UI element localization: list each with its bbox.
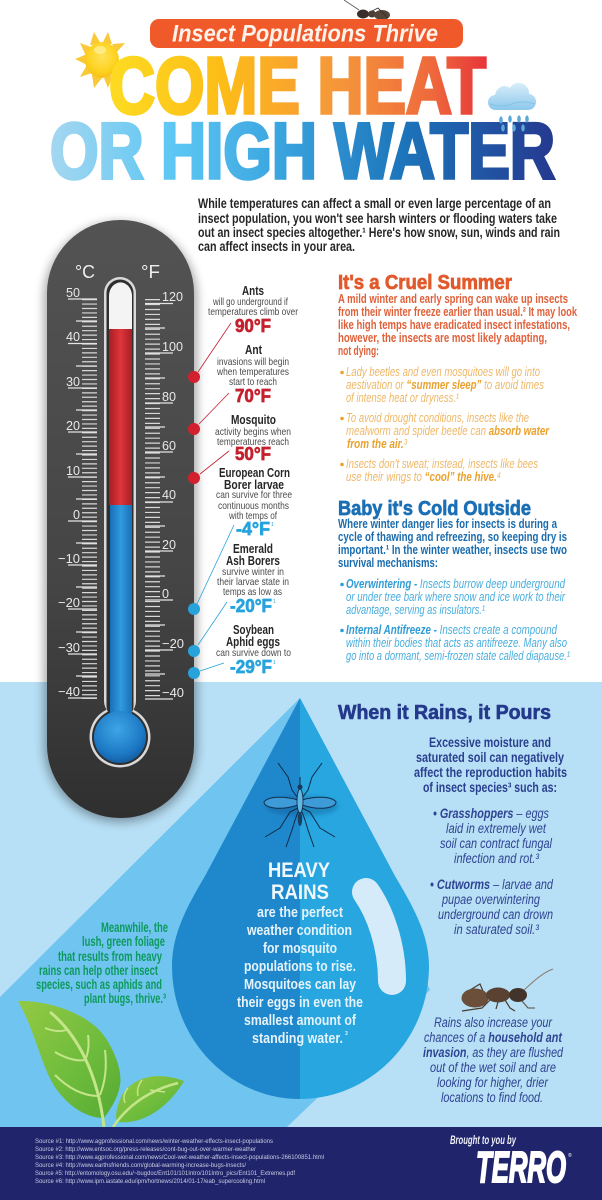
- text block: household ant invasion: chances of a household ant: [424, 1030, 562, 1045]
- title banner: Insect Populations Thrive: [172, 20, 438, 48]
- drop text: heavy rains: populations to rise.: [244, 959, 356, 975]
- text block: household ant invasion: out of the wet soil and are: [430, 1060, 556, 1075]
- celsius scale: 40: [66, 329, 80, 344]
- drop text: heavy rains: standing water.: [252, 1031, 343, 1047]
- fahrenheit scale: 120: [162, 289, 183, 304]
- callout: soybean aphid eggs -29F: [216, 623, 291, 677]
- fahrenheit scale: 0: [162, 586, 169, 601]
- celsius scale: −30: [58, 640, 80, 655]
- text block: green foliage: that results from heavy: [58, 949, 162, 964]
- celsius scale: 50: [66, 285, 80, 300]
- heading: cold outside: Baby it's Cold Outside: [338, 498, 531, 520]
- icon: mosquito: [264, 763, 338, 847]
- celsius scale: 10: [66, 463, 80, 478]
- drop text: heavy rains: Mosquitoes can lay: [244, 977, 356, 993]
- cold bullets: [340, 576, 570, 663]
- text block: cutworms: pupae overwintering: [441, 892, 540, 907]
- text block: household ant invasion: looking for higher, drier: [437, 1075, 548, 1090]
- panel: baby it's cold outside: [338, 498, 570, 663]
- callout: mosquito 50F: activity begins when: [215, 426, 291, 438]
- celsius scale: 20: [66, 418, 80, 433]
- callout: european corn borer -4F: can survive for three: [216, 489, 292, 501]
- intro text: can affect insects in your area.: [198, 238, 355, 254]
- cold body text: survival mechanisms:: [338, 555, 438, 570]
- callout: soybean aphid eggs -29F: can survive down to: [216, 647, 291, 659]
- text block: grasshoppers: • Grasshoppers – eggs: [433, 806, 549, 821]
- summer bullets: of intense heat or dryness.¹: [346, 390, 459, 405]
- callout: european corn borer -4F: -4°F: [236, 519, 270, 539]
- text block: cutworms: [430, 877, 553, 937]
- callout: european corn borer -4F: Borer larvae: [224, 478, 284, 492]
- text block: green foliage: rains can help other insect: [39, 963, 158, 978]
- celsius scale: 0: [73, 507, 80, 522]
- celsius scale: −20: [58, 595, 80, 610]
- drop text: heavy rains: their eggs in even the: [237, 995, 363, 1011]
- callout: european corn borer -4F: [216, 466, 292, 539]
- callout: soybean aphid eggs -29F: -29°F: [230, 657, 272, 677]
- callout: ant invasions 70F: when temperatures: [216, 366, 289, 378]
- text block: excessive moisture: affect the reproduction habits: [414, 765, 567, 780]
- heading: cruel summer: It's a Cruel Summer: [338, 272, 512, 294]
- celsius scale: −10: [58, 551, 80, 566]
- cold bullets: Internal Antifreeze - Insects create a compound: [346, 622, 558, 637]
- text block: household ant invasion: [423, 1015, 563, 1105]
- icon: ant on banner: [344, 0, 390, 20]
- text block: cutworms: in saturated soil.³: [454, 922, 539, 937]
- callout: emerald ash borers -20F: Ash Borers: [226, 554, 280, 568]
- fahrenheit scale: 20: [162, 537, 176, 552]
- text block: cutworms: underground can drown: [438, 907, 553, 922]
- drop text: heavy rains: smallest amount of: [244, 1013, 356, 1029]
- fahrenheit scale: 60: [162, 438, 176, 453]
- summer bullets: To avoid drought conditions, insects like the: [346, 410, 529, 425]
- drop text: heavy rains: for mosquito: [263, 941, 337, 957]
- cold body text: [338, 516, 567, 570]
- callout: emerald ash borers -20F: survive winter in: [222, 566, 284, 578]
- summer bullets: mealworm and spider beetle can absorb water: [346, 423, 550, 438]
- panel: footer: [0, 1127, 602, 1200]
- callout: emerald ash borers -20F: 1: [273, 599, 276, 605]
- logo: terro: ®: [568, 1152, 572, 1159]
- callout: emerald ash borers -20F: [217, 542, 289, 616]
- text block: green foliage: Meanwhile, the: [101, 920, 168, 935]
- text block: grasshoppers: infection and rot.³: [454, 851, 539, 866]
- drop text: heavy rains: [237, 859, 363, 1047]
- callout: ants 90F: will go underground if: [212, 296, 288, 308]
- thermometer: [44, 220, 197, 822]
- text block: household ant invasion: Rains also increase your: [434, 1015, 552, 1030]
- icon: brown ant: [462, 969, 553, 1011]
- panel: rain background band: [0, 682, 602, 1128]
- drop text: heavy rains: weather condition: [246, 923, 352, 939]
- callout: european corn borer -4F: with temps of: [228, 510, 277, 522]
- callout: mosquito 50F: temperatures reach: [217, 436, 289, 448]
- callout: soybean aphid eggs -29F: Aphid eggs: [226, 635, 280, 649]
- fahrenheit scale: °F: [141, 262, 160, 282]
- summer bullets: Insects don't sweat; instead, insects like bees: [346, 456, 538, 471]
- icon: water drop: [172, 698, 429, 1099]
- summer bullets: [340, 364, 550, 484]
- source list: Source #2: http://www.entsoc.org/press-releases/cont-bug-out-over-warmer-weather: [35, 1146, 257, 1153]
- text block: household ant invasion: locations to find food.: [441, 1090, 543, 1105]
- source list: Source #3: http://www.agprofessional.com/news/Cool-wet-weather-affects-insect-populations-266100851.html: [35, 1154, 325, 1161]
- callout: ants 90F: 90°F: [235, 316, 271, 336]
- callout: ant invasions 70F: 70°F: [235, 386, 271, 406]
- text block: green foliage: lush, green foliage: [82, 934, 165, 949]
- callout: mosquito 50F: [215, 413, 291, 464]
- text block: excessive moisture: of insect species³ such as:: [423, 780, 557, 795]
- celsius scale: °C: [75, 262, 95, 282]
- callout: emerald ash borers -20F: temps as low as: [223, 586, 282, 598]
- cold bullets: advantage, serving as insulators.¹: [346, 602, 485, 617]
- fahrenheit scale: 100: [162, 339, 183, 354]
- callout: emerald ash borers -20F: -20°F: [230, 596, 272, 616]
- text block: grasshoppers: laid in extremely wet: [446, 821, 547, 836]
- celsius scale: [58, 262, 97, 699]
- callout: mosquito 50F: 50°F: [235, 444, 271, 464]
- thermometer tube: [90, 277, 150, 768]
- drop text: heavy rains: 3: [345, 1031, 348, 1037]
- title: come heat: COME HEAT: [109, 41, 486, 130]
- text block: green foliage: [36, 920, 168, 1006]
- intro text: [198, 195, 560, 254]
- callout: ant invasions 70F: [216, 343, 289, 406]
- source list: Source #5: http://entomology.osu.edu/~bugdoc/Ent101/101Intro/101Intro_pics/Ent101_Extremes.pdf: [35, 1170, 295, 1177]
- summer body text: [338, 291, 578, 358]
- icon: rain cloud: [488, 83, 536, 132]
- callout: ants 90F: [208, 284, 298, 336]
- callout: ants 90F: temperatures climb over: [208, 306, 298, 318]
- callout: mosquito 50F: Mosquito: [231, 413, 276, 427]
- drop text: heavy rains: are the perfect: [257, 905, 343, 921]
- celsius scale: 30: [66, 374, 80, 389]
- callout: emerald ash borers -20F: their larvae state in: [217, 576, 289, 588]
- text block: grasshoppers: soil can contract fungal: [440, 836, 553, 851]
- callout: european corn borer -4F: European Corn: [219, 466, 290, 480]
- source list: Source #1: http://www.agprofessional.com/news/winter-weather-effects-insect-populations: [35, 1138, 274, 1145]
- fahrenheit scale: 80: [162, 389, 176, 404]
- fahrenheit scale: −40: [162, 685, 184, 700]
- text block: excessive moisture: [414, 735, 567, 795]
- brought to you by: Brought to you by: [450, 1133, 517, 1147]
- summer bullets: from the air.³: [347, 436, 407, 451]
- callout: ant invasions 70F: Ant: [245, 343, 263, 357]
- source list: Source #6: http://www.ipm.iastate.edu/ipm/hortnews/2014/01-17/eab_supercooling.html: [35, 1178, 266, 1185]
- source list: [35, 1138, 325, 1185]
- heading: when it rains: When it Rains, it Pours: [338, 702, 551, 724]
- summer body text: not dying:: [338, 343, 379, 358]
- fahrenheit scale: [141, 262, 184, 700]
- text block: green foliage: plant bugs, thrive.³: [84, 991, 166, 1006]
- icon: green leaves: [18, 1001, 184, 1127]
- callout: soybean aphid eggs -29F: Soybean: [233, 623, 274, 637]
- icon: sun: [75, 32, 125, 88]
- drop text: heavy rains: RAINS: [271, 881, 329, 904]
- summer bullets: use their wings to “cool” the hive.⁴: [346, 469, 501, 484]
- fahrenheit scale: −20: [162, 636, 184, 651]
- text block: excessive moisture: Excessive moisture and: [429, 735, 551, 750]
- callout: soybean aphid eggs -29F: 1: [273, 660, 276, 666]
- temperature pointers: [188, 323, 234, 679]
- callout: european corn borer -4F: continuous months: [218, 500, 289, 512]
- callout: ant invasions 70F: start to reach: [229, 376, 277, 388]
- panel: cruel summer: [338, 272, 578, 484]
- text block: cutworms: • Cutworms – larvae and: [430, 877, 553, 892]
- summer bullets: aestivation or “summer sleep” to avoid times: [346, 377, 544, 392]
- callout: ants 90F: Ants: [242, 284, 264, 298]
- drop text: heavy rains: HEAVY: [268, 859, 330, 882]
- celsius scale: −40: [58, 684, 80, 699]
- fahrenheit scale: 40: [162, 487, 176, 502]
- text block: household ant invasion: invasion, as they are flushed: [423, 1045, 563, 1060]
- text block: grasshoppers: [433, 806, 553, 866]
- callout: emerald ash borers -20F: Emerald: [233, 542, 273, 556]
- text block: excessive moisture: saturated soil can negatively: [416, 750, 564, 765]
- source list: Source #4: http://www.earthsfriends.com/global-warming-increase-bugs-insects/: [35, 1162, 246, 1169]
- callout: ant invasions 70F: invasions will begin: [217, 356, 289, 368]
- callout: european corn borer -4F: 1: [271, 522, 274, 528]
- text block: green foliage: species, such as aphids and: [36, 977, 162, 992]
